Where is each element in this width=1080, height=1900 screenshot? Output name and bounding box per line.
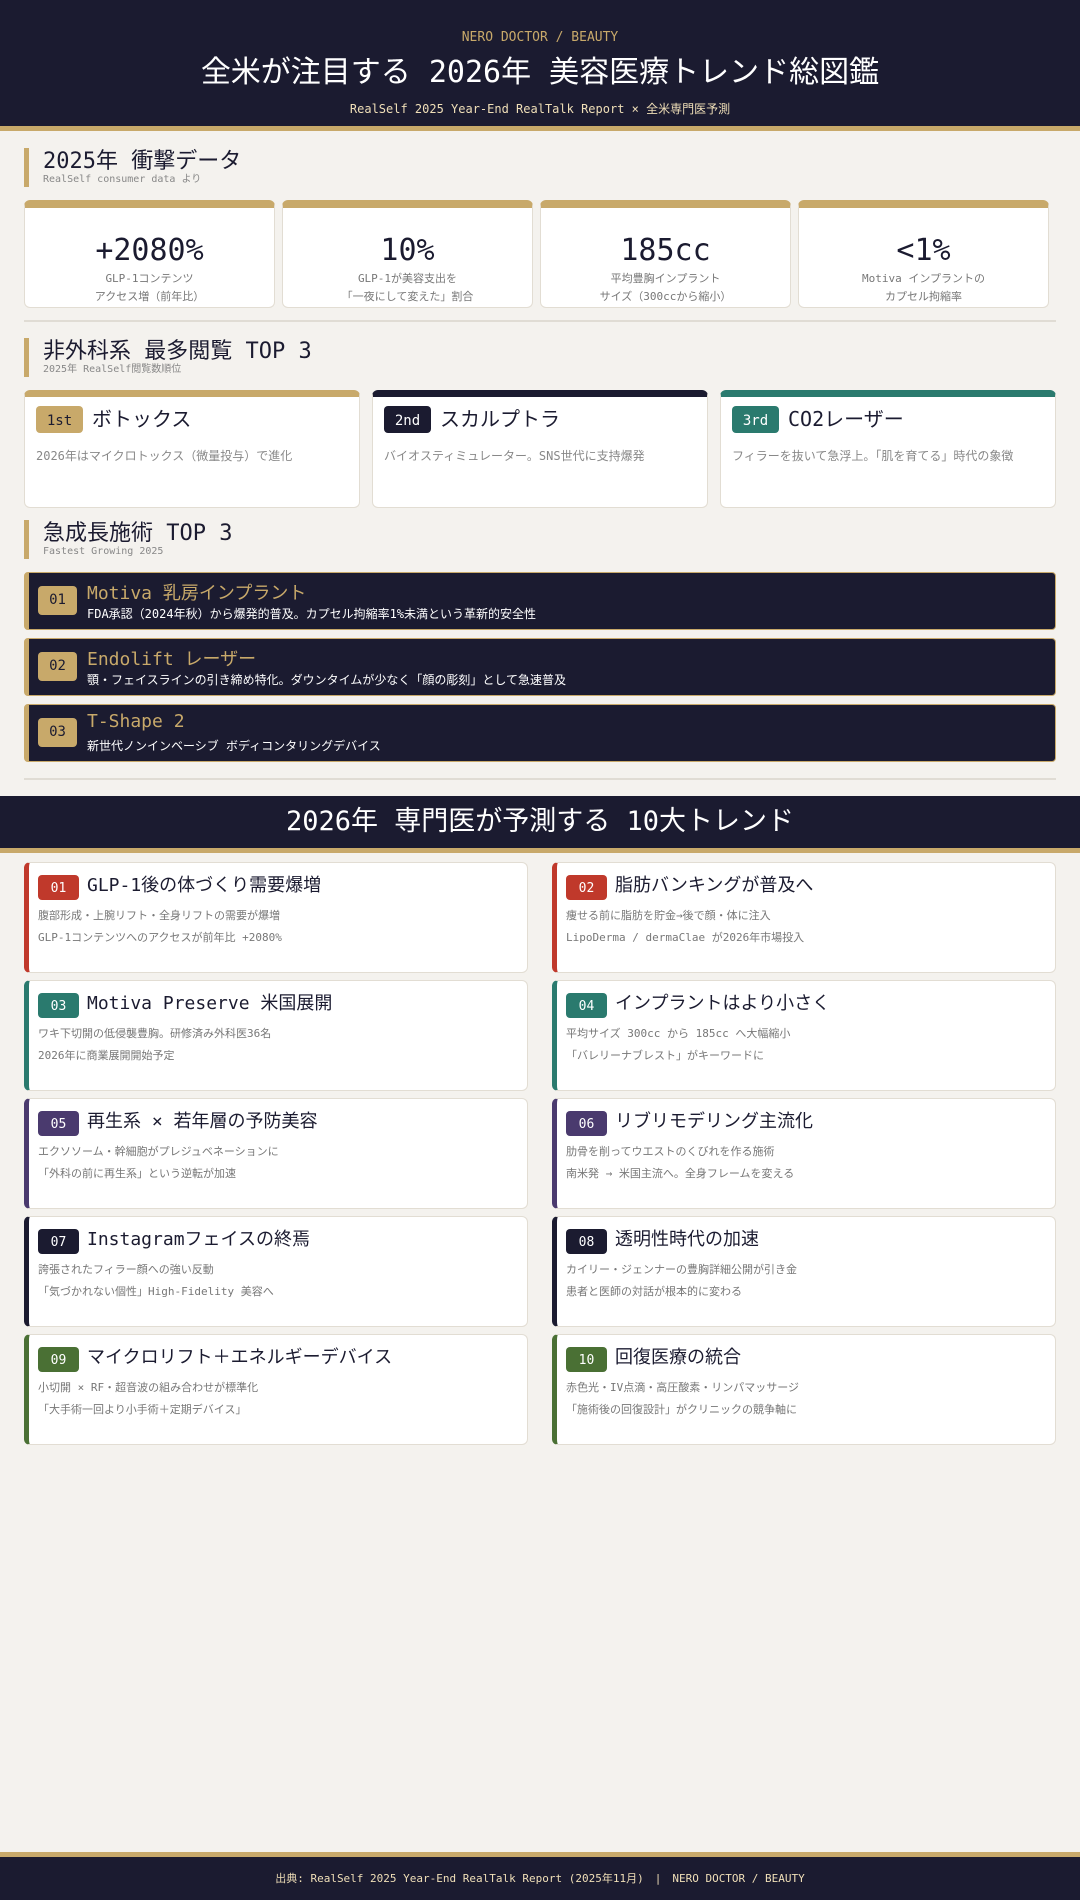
trend 07 bbox=[24, 1216, 528, 1327]
trend 06: 06 bbox=[579, 1117, 594, 1132]
trend 06: リブリモデリング主流化 bbox=[615, 1111, 813, 1132]
trend 04 bbox=[552, 980, 1056, 1091]
trend 02: 脂肪バンキングが普及へ bbox=[615, 875, 813, 896]
stat card 2: 「一夜にして変えた」割合 bbox=[342, 290, 473, 303]
growth row 2: Endolift レーザー bbox=[87, 649, 256, 670]
trend 03: Motiva Preserve 米国展開 bbox=[87, 993, 332, 1014]
trend 02: LipoDerma / dermaClae が2026年市場投入 bbox=[566, 931, 804, 944]
section heading: top 3: 2025年 RealSelf閲覧数順位 bbox=[43, 364, 181, 375]
trend 05: 05 bbox=[51, 1117, 66, 1132]
section heading: 2025 data: RealSelf consumer data より bbox=[43, 174, 201, 185]
trend 10: 「施術後の回復設計」がクリニックの競争軸に bbox=[566, 1403, 797, 1416]
section heading: top 3: 非外科系 最多閲覧 TOP 3 bbox=[43, 339, 312, 364]
trend 10: 回復医療の統合 bbox=[615, 1347, 741, 1368]
subtitle: RealSelf 2025 Year-End RealTalk Report × 全米専門医予測 bbox=[350, 102, 730, 116]
trend 03: 03 bbox=[51, 999, 66, 1014]
trend 04: 平均サイズ 300cc から 185cc へ大幅縮小 bbox=[566, 1027, 790, 1040]
top card 2: 2nd bbox=[395, 413, 420, 429]
top card 1: 1st bbox=[47, 413, 72, 429]
stat card 1: アクセス増（前年比） bbox=[95, 290, 204, 303]
trend 06 bbox=[552, 1098, 1056, 1209]
stat card 3: 185cc bbox=[620, 233, 711, 268]
top card 2: スカルプトラ bbox=[440, 407, 560, 431]
trend 09 bbox=[24, 1334, 528, 1445]
trend 01: GLP-1後の体づくり需要爆増 bbox=[87, 875, 321, 896]
section heading: fastest growing: 急成長施術 TOP 3 bbox=[43, 521, 232, 546]
trend 09: 小切開 × RF・超音波の組み合わせが標準化 bbox=[38, 1381, 258, 1394]
trend 04: 04 bbox=[579, 999, 594, 1014]
trend 03: ワキ下切開の低侵襲豊胸。研修済み外科医36名 bbox=[38, 1027, 271, 1040]
growth row 2 bbox=[24, 638, 1056, 696]
growth row 1: FDA承認（2024年秋）から爆発的普及。カプセル拘縮率1%未満という革新的安全性 bbox=[87, 607, 536, 621]
trend 07: Instagramフェイスの終焉 bbox=[87, 1229, 310, 1250]
trend 08: 透明性時代の加速 bbox=[615, 1229, 759, 1250]
trend 02: 02 bbox=[579, 881, 594, 896]
title: 全米が注目する 2026年 美容医療トレンド総図鑑 bbox=[201, 55, 879, 90]
growth row 3: T-Shape 2 bbox=[87, 711, 185, 732]
footer: 出典: RealSelf 2025 Year-End RealTalk Report (2025年11月) | NERO DOCTOR / BEAUTY bbox=[275, 1872, 805, 1885]
trend 03: 2026年に商業展開開始予定 bbox=[38, 1049, 174, 1062]
stat card 4 bbox=[798, 200, 1049, 308]
stat card 2: GLP-1が美容支出を bbox=[358, 272, 457, 285]
brand label: NERO DOCTOR / BEAUTY bbox=[462, 30, 618, 45]
trend 10 bbox=[552, 1334, 1056, 1445]
trend 04: インプラントはより小さく bbox=[615, 993, 830, 1014]
stat card 1: +2080% bbox=[95, 233, 204, 268]
section heading: fastest growing bbox=[24, 520, 232, 559]
stat card 3 bbox=[540, 200, 791, 308]
top card 1: 2026年はマイクロトックス（微量投与）で進化 bbox=[36, 449, 292, 463]
stat card 2: 10% bbox=[380, 233, 435, 268]
trend 10: 赤色光・IV点滴・高圧酸素・リンパマッサージ bbox=[566, 1381, 799, 1394]
trend 09: マイクロリフト＋エネルギーデバイス bbox=[87, 1347, 392, 1368]
header bbox=[0, 0, 1080, 131]
trend 08: 08 bbox=[579, 1235, 594, 1250]
trend 06: 肋骨を削ってウエストのくびれを作る施術 bbox=[566, 1145, 774, 1158]
top card 2: バイオスティミュレーター。SNS世代に支持爆発 bbox=[384, 449, 645, 463]
trend 09: 09 bbox=[51, 1353, 66, 1368]
growth row 1 bbox=[24, 572, 1056, 630]
trend 06: 南米発 → 米国主流へ。全身フレームを変える bbox=[566, 1167, 794, 1180]
trend 08 bbox=[552, 1216, 1056, 1327]
trend 01: 01 bbox=[51, 881, 66, 896]
trends header bbox=[0, 796, 1080, 853]
stat card 1 bbox=[24, 200, 275, 308]
trend 03 bbox=[24, 980, 528, 1091]
stat card 1: GLP-1コンテンツ bbox=[105, 272, 194, 285]
trend 08: 患者と医師の対話が根本的に変わる bbox=[566, 1285, 742, 1298]
stat card 2 bbox=[282, 200, 533, 308]
trend 07: 「気づかれない個性」High-Fidelity 美容へ bbox=[38, 1285, 274, 1298]
section heading: fastest growing: Fastest Growing 2025 bbox=[43, 546, 163, 557]
stat card 4: <1% bbox=[896, 233, 951, 268]
footer bbox=[0, 1852, 1080, 1900]
trend 07: 07 bbox=[51, 1235, 66, 1250]
trend 10: 10 bbox=[579, 1353, 594, 1368]
growth row 1: 01 bbox=[49, 592, 66, 608]
trend 05 bbox=[24, 1098, 528, 1209]
growth row 2: 02 bbox=[49, 658, 66, 674]
trend 04: 「バレリーナブレスト」がキーワードに bbox=[566, 1049, 764, 1062]
stat card 3: 平均豊胸インプラント bbox=[611, 272, 720, 285]
trends header: 2026年 専門医が予測する 10大トレンド bbox=[286, 806, 794, 837]
stat card 4: カプセル拘縮率 bbox=[885, 290, 962, 303]
top card 2 bbox=[372, 390, 708, 508]
trend 01 bbox=[24, 862, 528, 973]
top card 3: 3rd bbox=[743, 413, 768, 429]
growth row 1: Motiva 乳房インプラント bbox=[87, 583, 306, 604]
top card 3: CO2レーザー bbox=[788, 407, 904, 431]
trend 08: カイリー・ジェンナーの豊胸詳細公開が引き金 bbox=[566, 1263, 797, 1276]
top card 1 bbox=[24, 390, 360, 508]
growth row 3: 新世代ノンインベーシブ ボディコンタリングデバイス bbox=[87, 739, 381, 753]
top card 3 bbox=[720, 390, 1056, 508]
stat card 4: Motiva インプラントの bbox=[862, 272, 985, 285]
growth row 3: 03 bbox=[49, 724, 66, 740]
section heading: 2025 data: 2025年 衝撃データ bbox=[43, 149, 241, 174]
trend 07: 誇張されたフィラー顔への強い反動 bbox=[38, 1263, 214, 1276]
section heading: 2025 data bbox=[24, 148, 241, 187]
trend 05: 再生系 × 若年層の予防美容 bbox=[87, 1111, 318, 1132]
trend 05: エクソソーム・幹細胞がプレジュベネーションに bbox=[38, 1145, 279, 1158]
trend 02: 痩せる前に脂肪を貯金→後で顔・体に注入 bbox=[566, 909, 771, 922]
growth row 2: 顎・フェイスラインの引き締め特化。ダウンタイムが少なく「顔の彫刻」として急速普及 bbox=[87, 673, 566, 687]
trend 05: 「外科の前に再生系」という逆転が加速 bbox=[38, 1167, 236, 1180]
section heading: top 3 bbox=[24, 338, 312, 377]
trend 01: 腹部形成・上腕リフト・全身リフトの需要が爆増 bbox=[38, 909, 280, 922]
stat card 3: サイズ（300ccから縮小） bbox=[600, 290, 731, 303]
growth row 3 bbox=[24, 704, 1056, 762]
trend 09: 「大手術一回より小手術＋定期デバイス」 bbox=[38, 1403, 246, 1416]
trend 01: GLP-1コンテンツへのアクセスが前年比 +2080% bbox=[38, 931, 282, 944]
top card 3: フィラーを抜いて急浮上。「肌を育てる」時代の象徴 bbox=[732, 449, 1013, 463]
trend 02 bbox=[552, 862, 1056, 973]
top card 1: ボトックス bbox=[92, 407, 191, 431]
